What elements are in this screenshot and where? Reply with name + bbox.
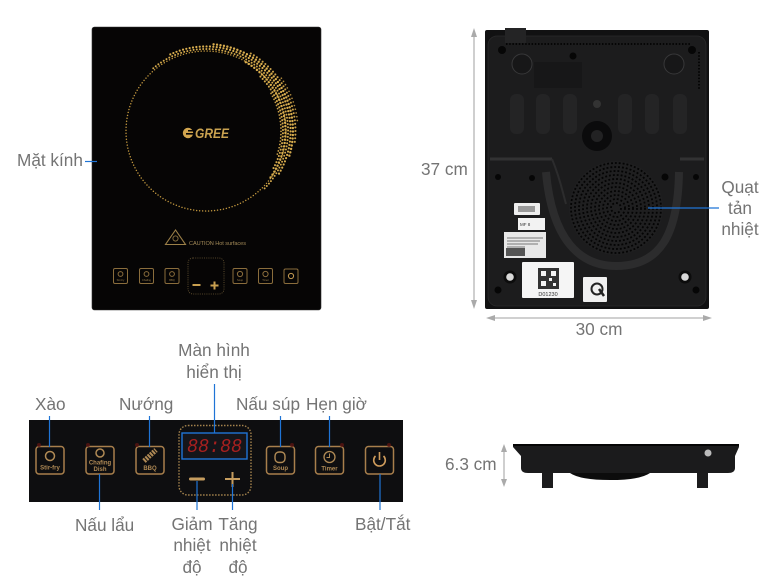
- dimension: thickness 6.3 cm: 6.3 cm: [445, 454, 497, 474]
- label: Tăng nhiệt độ: [218, 484, 258, 577]
- vent dots: [506, 44, 699, 90]
- label: Màn hình hiển thị: Màn hình: [178, 340, 250, 360]
- label: Giảm nhiệt độ: [171, 481, 213, 577]
- label: Nấu lẩu: [75, 474, 134, 535]
- button: Chafing Dish: Dish: [93, 467, 107, 473]
- power cord tab: [505, 28, 526, 43]
- caution triangle and text: CAUTION Hot surfaces: [189, 241, 246, 247]
- dimension: width 30 cm: 30 cm: [576, 319, 622, 339]
- button: Chafing Dish: Chafing: [89, 460, 111, 466]
- label: Xào: [35, 394, 66, 447]
- panel: control strip close-up: [29, 420, 403, 502]
- label: Nấu súp: [236, 394, 300, 447]
- small control buttons: Timer: [262, 278, 269, 282]
- leader line: fan: [648, 207, 719, 209]
- product labels and QR code: [504, 203, 607, 302]
- label: Xào: Xào: [35, 394, 66, 414]
- button: BBQ: [136, 446, 164, 474]
- caution triangle and text: [166, 230, 246, 247]
- label: Màn hình hiển thị: [178, 340, 250, 433]
- small control buttons: [114, 268, 298, 284]
- label: Bật/Tắt: [355, 474, 411, 534]
- fan vent grille: [569, 161, 663, 255]
- label: Nướng: Nướng: [119, 394, 173, 414]
- label: Mặt kính: Mặt kính: [17, 150, 83, 170]
- button: Stir-fry: [36, 446, 64, 474]
- label: Tăng nhiệt độ: nhiệt: [219, 535, 257, 555]
- small display zone with plus and minus: [188, 258, 224, 294]
- plus key: [225, 472, 240, 487]
- U-shaped channel: [490, 159, 704, 266]
- small control buttons: Stir-fry: [117, 278, 125, 282]
- label: Quạt tản nhiệt: [721, 177, 759, 239]
- label: Giảm nhiệt độ: độ: [182, 557, 202, 577]
- label: Màn hình hiển thị: hiển thị: [186, 362, 242, 382]
- small control buttons: BBQ: [169, 278, 175, 282]
- dotted gold heating ring: [126, 44, 298, 211]
- button: BBQ: BBQ: [143, 466, 157, 472]
- label: Quạt tản nhiệt: tản: [728, 198, 752, 218]
- label: Hẹn giờ: Hẹn giờ: [306, 394, 367, 414]
- logo: GREE: [183, 126, 230, 141]
- panel: induction cooktop top view: [92, 27, 321, 310]
- button: power: [366, 446, 394, 474]
- button: Chafing Dish: [86, 446, 114, 474]
- red indicator glows: [37, 443, 391, 447]
- temperature display zone: [179, 426, 251, 495]
- label: Giảm nhiệt độ: nhiệt: [173, 535, 211, 555]
- label: Tăng nhiệt độ: Tăng: [218, 514, 258, 534]
- button: Timer: Timer: [321, 466, 338, 472]
- label: Nấu súp: Nấu súp: [236, 394, 300, 414]
- small control buttons: Soup: [237, 278, 244, 282]
- button: Stir-fry: Stir-fry: [40, 466, 60, 472]
- central boss: [582, 100, 612, 151]
- label: Nướng: [119, 394, 173, 447]
- panel: cooktop underside view: [485, 28, 719, 309]
- rubber feet and screw holes: [494, 46, 700, 294]
- label: Tăng nhiệt độ: độ: [228, 557, 248, 577]
- dimension: height 37 cm: 37 cm: [421, 159, 468, 179]
- label: Nấu lẩu: Nấu lẩu: [75, 515, 134, 535]
- panel: cooktop side view: [513, 444, 739, 488]
- logo: GREE: GREE: [195, 126, 230, 141]
- product labels and QR code: MF 8: [520, 222, 531, 227]
- product labels and QR code: D01230: [538, 292, 558, 298]
- dimension: thickness 6.3 cm: [445, 444, 507, 487]
- button: Soup: [266, 446, 294, 474]
- moulded ribs: [510, 62, 687, 134]
- small control buttons: Chafing: [142, 278, 152, 282]
- dimension: width 30 cm: [486, 315, 712, 339]
- label: Giảm nhiệt độ: Giảm: [171, 514, 213, 534]
- dimension: height 37 cm: [421, 28, 477, 309]
- button: Soup: Soup: [273, 466, 288, 472]
- minus key: [189, 478, 205, 480]
- label: Hẹn giờ: [306, 394, 367, 447]
- label: Quạt tản nhiệt: nhiệt: [721, 219, 759, 239]
- red digit readout: 88:88: [187, 436, 242, 458]
- label: Bật/Tắt: Bật/Tắt: [355, 514, 411, 534]
- label: Quạt tản nhiệt: Quạt: [721, 177, 759, 197]
- button: Timer: [316, 446, 344, 474]
